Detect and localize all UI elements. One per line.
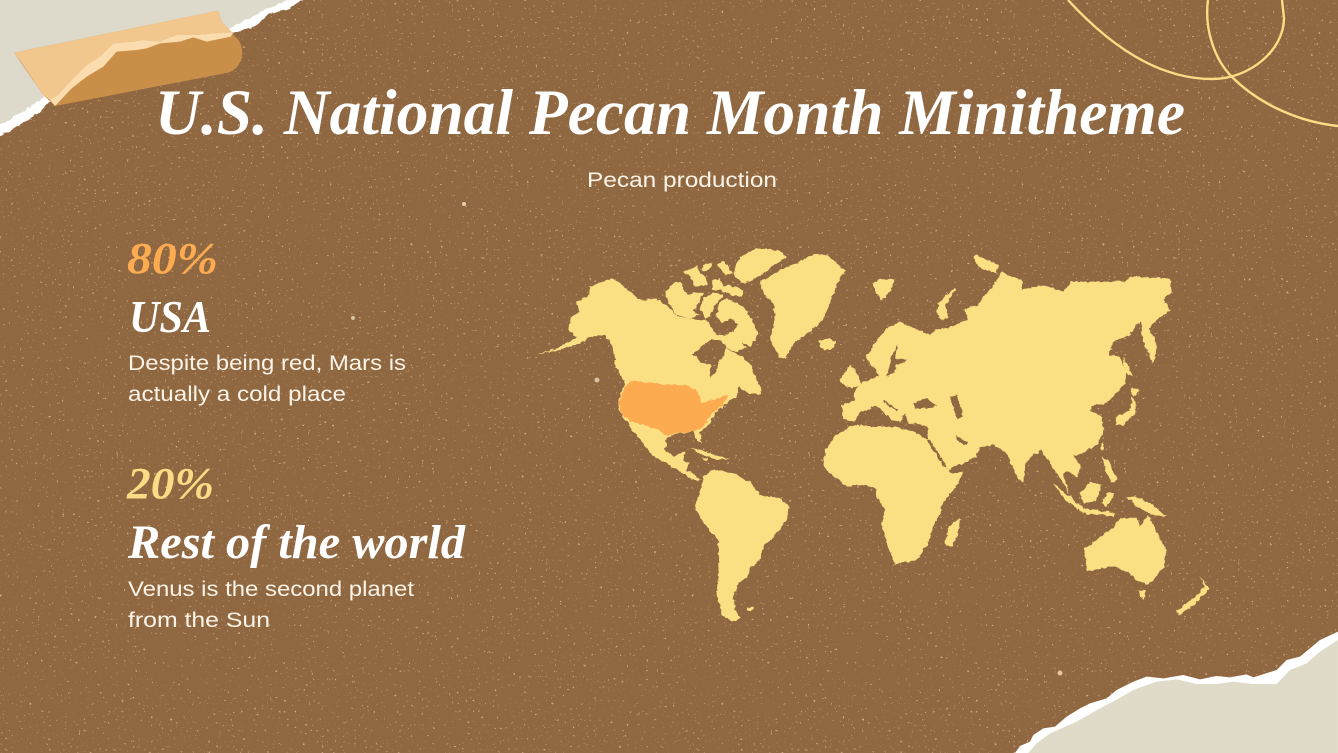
stat block: rest of the world [126, 459, 466, 632]
map: USA highlight [619, 381, 728, 437]
map: Americas and Greenland [537, 248, 845, 622]
stat heading: USA: USA [129, 291, 211, 342]
stat description line 2: rest of the world: from the Sun [128, 609, 270, 632]
stat description: rest of the world: Venus is the second planet [128, 578, 414, 601]
torn paper: top left corner [0, 0, 330, 150]
map: Eurasia, Africa and Oceania [820, 255, 1209, 615]
stat description line 2: USA: actually a cold place [128, 383, 346, 406]
subtitle: Pecan production [587, 169, 777, 192]
title: U.S. National Pecan Month Minitheme [155, 77, 1185, 149]
torn paper: bottom right corner [1015, 632, 1338, 753]
stat value: 20%: 20% [126, 459, 214, 508]
tape: top left [14, 11, 242, 106]
stat value: 80%: 80% [127, 234, 218, 283]
stat heading: rest of the world: Rest of the world [127, 516, 466, 569]
stat block: USA [127, 234, 406, 406]
stat description: USA: Despite being red, Mars is [128, 352, 406, 375]
map: inland seas [883, 343, 968, 473]
world map [537, 248, 1209, 622]
decorative curled lines: top right [1068, 0, 1338, 126]
